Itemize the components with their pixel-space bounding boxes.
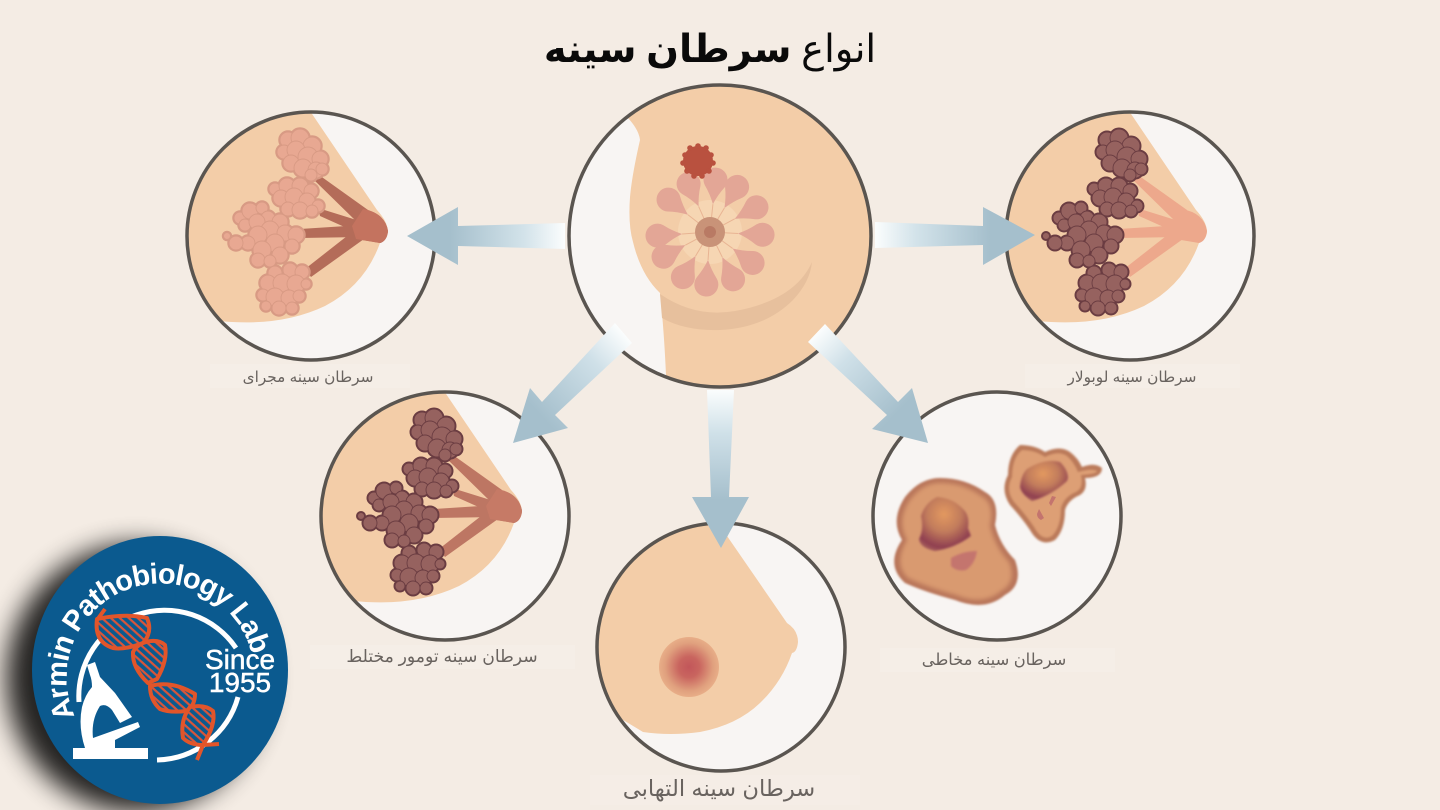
- icon: tumor lump: [680, 143, 716, 179]
- label: mixed tumor: سرطان سینه تومور مختلط: [346, 646, 538, 666]
- label: ductal: [210, 364, 410, 388]
- icon: DNA helix: [97, 609, 219, 760]
- logo ring: [79, 610, 238, 760]
- panel: lobular breast cancer: [989, 105, 1254, 360]
- panel: ductal breast cancer: [170, 105, 435, 360]
- logo since text: Since: [205, 644, 275, 675]
- arrow: to mucinous: [808, 324, 928, 443]
- panel: central breast diagram: [569, 70, 880, 400]
- label: inflammatory: [590, 775, 860, 805]
- panel: inflammatory breast cancer: [590, 520, 845, 771]
- icon: microscope: [73, 662, 148, 759]
- label: mucinous: [880, 648, 1115, 672]
- breast fold shadow: [660, 262, 812, 330]
- logo: Armin Pathobiology Lab: [0, 523, 288, 810]
- cell: small mucinous cell: [1004, 445, 1102, 542]
- label: mucinous: سرطان سینه مخاطی: [922, 651, 1066, 670]
- panel: mixed tumor breast cancer: [304, 385, 569, 640]
- arrow: to lobular: [875, 207, 1035, 265]
- label: mixed tumor: [310, 645, 575, 669]
- arrow: to inflammatory: [692, 390, 749, 548]
- breast tissue: [628, 86, 870, 386]
- cell: large mucinous cell: [894, 478, 1018, 605]
- label: lobular: [1025, 364, 1240, 388]
- icon: inflamed spot: [659, 637, 719, 697]
- label: ductal: سرطان سینه مجرای: [243, 369, 373, 386]
- title: انواع سرطان سینه: [544, 29, 876, 72]
- arrow: to mixed tumor: [513, 323, 632, 443]
- logo since text: [205, 644, 275, 698]
- logo arc text: Armin Pathobiology Lab: [48, 562, 268, 716]
- logo since text: 1955: [209, 667, 271, 698]
- arrow: to ductal: [407, 207, 565, 265]
- panel: mucinous breast cancer: [873, 392, 1121, 640]
- label: lobular: سرطان سینه لوبولار: [1067, 369, 1196, 386]
- label: inflammatory: سرطان سینه التهابی: [623, 776, 815, 802]
- ducts and lobules radial diagram: [645, 166, 775, 297]
